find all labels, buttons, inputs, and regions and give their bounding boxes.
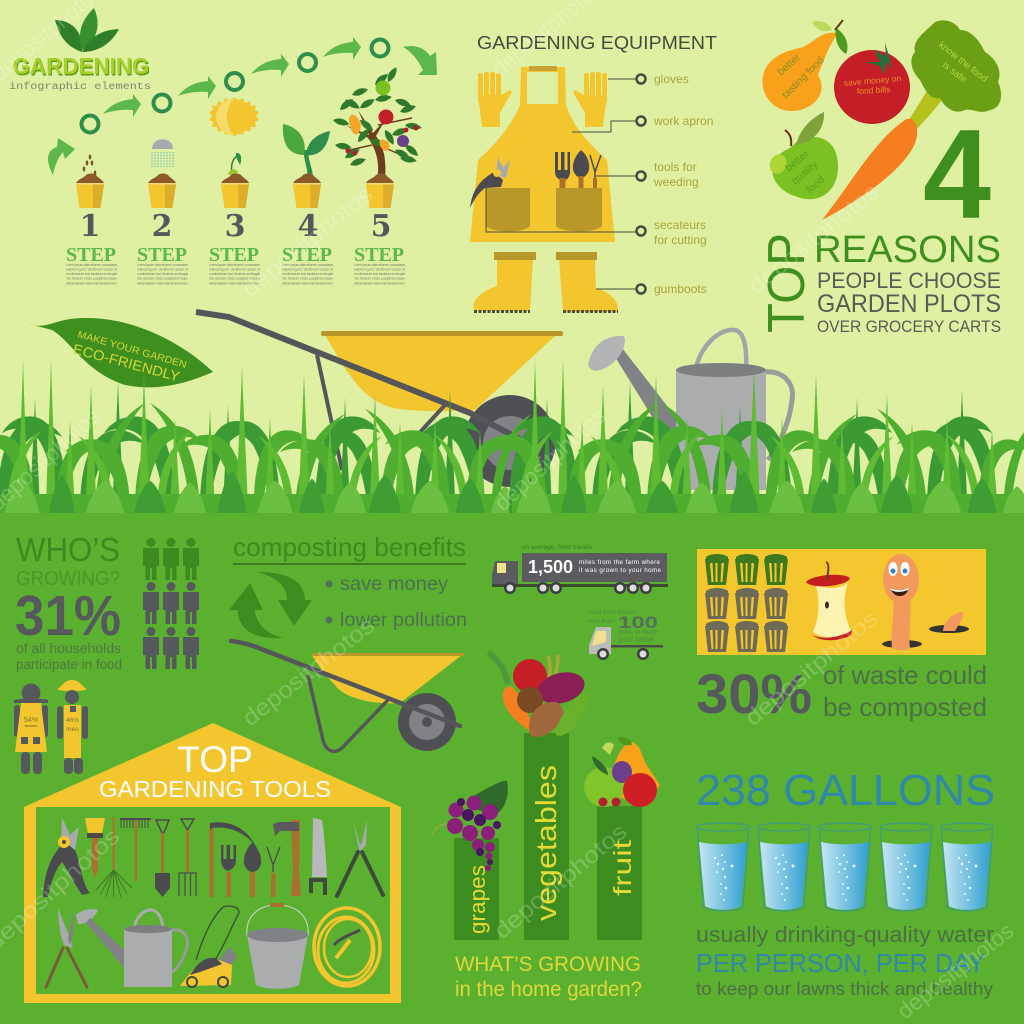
leaf text: ECO-FRIENDLY [71, 340, 182, 385]
heading: gardening tools: GARDENING TOOLS [99, 776, 331, 802]
yellow banner [697, 549, 986, 655]
icon: apron [470, 66, 615, 242]
grass blades left [0, 358, 531, 513]
step label: STEP [354, 244, 404, 266]
frame [308, 675, 388, 751]
tool: fork [179, 819, 196, 896]
tool: lawn mower [180, 906, 239, 987]
tray [312, 655, 462, 703]
truck: local food [588, 609, 663, 660]
tool: bucket [247, 903, 308, 989]
icon: recycle arrows [229, 572, 312, 638]
caption: local food travels [588, 609, 638, 616]
icon: carrot and broccoli: is safe [940, 60, 969, 85]
benefit: lower pollution: lower pollution [340, 609, 467, 631]
icon: fruit cluster [584, 737, 660, 807]
wheel [464, 395, 556, 487]
logo wordmark shadow and word: GARDENING [12, 53, 150, 79]
step number: 3 [225, 209, 245, 244]
equipment labels: tools for [654, 160, 697, 174]
icon: apron secateurs [470, 157, 510, 208]
legs [317, 355, 445, 470]
tool: pruner [43, 817, 90, 897]
icon: logo leaves [55, 8, 119, 52]
icon: fruit tree [332, 66, 422, 178]
arrow path [48, 37, 437, 175]
lorem text: condimentum erat, faucibus non feugiat [66, 272, 117, 276]
icon: pot [76, 174, 104, 208]
tool: saw [309, 818, 327, 895]
icon: apple: food [804, 174, 827, 196]
truck: long-distance food [492, 544, 668, 594]
step 5 [332, 66, 422, 286]
trailer text: miles from the farm where [579, 559, 661, 566]
panel: top 4 reasons [758, 20, 1001, 336]
lower green background [0, 513, 1024, 1024]
tool: watering can [76, 909, 187, 987]
handle top [695, 330, 746, 372]
trailer [522, 553, 667, 582]
chart: what's growing [432, 653, 660, 1001]
equipment labels: work apron [653, 114, 713, 128]
lorem text: nisl. Aenean. Class suscipit dui neque [354, 276, 405, 280]
icon: worm [882, 554, 969, 650]
step number: 4 [298, 209, 318, 244]
watermark: depositphotos [740, 605, 883, 731]
bar: vegetables [524, 733, 569, 940]
lorem text: Lorem ipsum dolor sit amet, consectetur [282, 263, 334, 267]
rim [676, 363, 766, 377]
step label: STEP [282, 244, 332, 266]
heading: 238 GALLONS [696, 766, 995, 815]
lorem text: adipiscing elit. Vestibulum auctor at [209, 268, 260, 272]
icon: weeding tools [555, 150, 601, 190]
equipment labels: weeding [653, 175, 699, 189]
label: vegetables: vegetables [531, 765, 563, 921]
lorem text: adipiscing elit. Vestibulum auctor at [282, 268, 333, 272]
chassis [492, 584, 668, 587]
icon: grapes [432, 781, 508, 871]
icon: watering shower [152, 139, 173, 167]
lorem text: Lorem ipsum dolor sit amet, consectetur [209, 263, 261, 267]
heading: composting benefits [233, 532, 466, 562]
watermark: depositphotos [237, 612, 379, 731]
tool: loppers [46, 908, 87, 987]
step 2 [137, 139, 189, 286]
small wheelbarrow [231, 641, 464, 751]
lorem text: nisl. Aenean. Class suscipit dui neque [66, 276, 117, 280]
lorem text: Lorem ipsum dolor sit amet, consectetur [66, 263, 118, 267]
REASONS heading: REASONS [814, 229, 1001, 271]
reasons subheading: OVER GROCERY CARTS [817, 318, 1001, 336]
house frame [24, 723, 401, 1003]
lorem text: nisl. Aenean. Class suscipit dui neque [209, 276, 260, 280]
wheel [398, 693, 456, 751]
step number: 2 [152, 209, 172, 244]
icon: pear [762, 20, 848, 111]
watermark: depositphotos [489, 403, 610, 516]
lorem text: condimentum erat, faucibus non feugiat [282, 272, 333, 276]
step 3 [209, 97, 261, 286]
eco-friendly leaf [25, 318, 213, 387]
stat: 30% [696, 662, 812, 725]
rose [588, 336, 625, 371]
emphasised caption: PER PERSON, PER DAY [696, 948, 985, 978]
tool: hand fork [221, 845, 236, 897]
icon: trash cans [705, 554, 788, 652]
lorem text: varius aliquam, dolor odio tincidunt sem [209, 282, 260, 286]
icon: vegetables [488, 653, 589, 737]
equipment labels: gumboots [654, 282, 707, 296]
logo wordmark shadow and word: GARDENING [14, 54, 150, 80]
reasons subheading: PEOPLE CHOOSE [817, 268, 1001, 293]
body [676, 370, 766, 490]
steps flow arrows and circles [48, 37, 437, 175]
who's growing panel [14, 531, 199, 774]
step number: 1 [80, 209, 100, 244]
caption: be composted [823, 692, 987, 722]
lorem text: varius aliquam, dolor odio tincidunt sem [282, 282, 333, 286]
lorem text: condimentum erat, faucibus non feugiat [137, 272, 188, 276]
lorem text: varius aliquam, dolor odio tincidunt sem [354, 282, 405, 286]
step circles [82, 40, 388, 132]
benefit: save money: save money [340, 573, 448, 595]
lorem text: nisl. Aenean. Class suscipit dui neque [282, 276, 333, 280]
leaf text: MAKE YOUR GARDEN [76, 329, 188, 371]
caption: your table [618, 635, 654, 644]
icon: sprout [228, 153, 241, 176]
grass band [0, 358, 1024, 513]
panel: gardening equipment [470, 32, 717, 312]
man figure: men [66, 726, 79, 733]
caption: on average, food travels [522, 544, 592, 551]
lorem text: condimentum erat, faucibus non feugiat [354, 272, 405, 276]
tool: leaf rake [96, 817, 132, 897]
tool: hose [314, 908, 380, 986]
big number 4: 4 [923, 103, 991, 245]
large wheelbarrow [196, 312, 563, 487]
bar: fruit [597, 806, 642, 940]
caption: participate in food [16, 657, 122, 672]
people pictogram [143, 538, 199, 669]
equipment labels [653, 72, 713, 296]
step label: STEP [209, 244, 259, 266]
large watering can [588, 330, 793, 490]
lorem text: condimentum erat, faucibus non feugiat [209, 272, 260, 276]
logo subtitle: infographic elements [9, 81, 151, 93]
tool: scythe [210, 822, 255, 897]
icon: apple: better [783, 148, 812, 174]
handle [196, 312, 535, 447]
tool: axe [273, 820, 301, 896]
woman figure: women [25, 723, 37, 728]
trailer text: it was grown to your home [579, 567, 662, 574]
man figure: 46% [66, 717, 79, 724]
cab [492, 561, 518, 585]
caption: of all households [16, 641, 121, 656]
cab [589, 627, 611, 654]
leader lines [486, 79, 636, 289]
lorem text: adipiscing elit. Vestibulum auctor at [66, 268, 117, 272]
equipment labels: for cutting [654, 233, 707, 247]
label: fruit: fruit [609, 840, 637, 896]
icon: apple core [806, 562, 852, 640]
step 4 [282, 124, 334, 286]
label: grapes: grapes [465, 865, 490, 934]
reasons subheading: GARDEN PLOTS [817, 290, 1001, 318]
lorem text: adipiscing elit. Vestibulum auctor at [354, 268, 405, 272]
equipment labels: secateurs [654, 218, 706, 232]
heading: GARDENING EQUIPMENT [477, 32, 717, 53]
caption: less than [588, 618, 614, 625]
step number: 5 [371, 209, 391, 244]
tool: brush [85, 818, 105, 878]
distance: 1,500 [528, 557, 573, 577]
caption: usually drinking-quality water [696, 922, 994, 947]
tool: trowel [244, 842, 261, 897]
handle [231, 641, 460, 726]
icon: left glove [478, 72, 512, 127]
watermark: depositphotos [743, 178, 883, 299]
icon: pot [148, 174, 176, 208]
icon: pot [366, 174, 394, 208]
icon: apple: quality [789, 158, 821, 187]
icon: gumboots [473, 252, 618, 312]
rotated TOP: TOP [758, 233, 816, 333]
icon: seedling [283, 124, 330, 177]
icon: apple [767, 112, 838, 199]
tray [325, 335, 556, 411]
tool: rake [120, 818, 151, 881]
leader dots [636, 74, 646, 294]
logo: gardening [9, 8, 151, 93]
woman figure [14, 684, 48, 774]
composting benefits panel [229, 532, 467, 638]
heading rule [233, 563, 466, 565]
caption: to keep our lawns thick and healthy [696, 978, 994, 999]
caption: miles to reach [618, 629, 659, 636]
icon: pear: better [775, 51, 803, 78]
icon: sun [209, 97, 259, 137]
icon: right glove [573, 72, 607, 127]
tray rim [312, 653, 464, 656]
watermark: depositphotos [489, 818, 632, 944]
pockets [486, 188, 602, 231]
icon: carrot and broccoli: know the food [936, 40, 990, 85]
icon: seeds [83, 154, 96, 176]
reasons subheading [817, 268, 1001, 336]
wheels [504, 582, 652, 594]
watermark: depositphotos [237, 181, 377, 302]
tool: weeder [267, 847, 280, 897]
icon: pot [293, 174, 321, 208]
equipment labels: gloves [654, 72, 689, 86]
panel: compost waste [696, 549, 987, 725]
step 1 [66, 154, 118, 286]
spout [612, 348, 682, 465]
step label: STEP [137, 244, 187, 266]
side handle [763, 372, 793, 460]
lorem text: varius aliquam, dolor odio tincidunt sem [66, 282, 117, 286]
icon: tomato: food bills [857, 84, 891, 96]
heading: WHO’S [16, 531, 120, 568]
subheading: GROWING? [16, 568, 120, 590]
panel: top gardening tools house [24, 723, 401, 1003]
stat: 31% [15, 584, 121, 648]
man figure [57, 680, 88, 774]
lorem text: Lorem ipsum dolor sit amet, consectetur [137, 263, 189, 267]
icon: carrot and broccoli [822, 20, 1001, 220]
chart caption: in the home garden? [455, 978, 642, 1001]
heading: top: TOP [177, 739, 253, 780]
lorem text: Lorem ipsum dolor sit amet, consectetur [354, 263, 406, 267]
leaf shape [25, 318, 213, 387]
bullets [326, 580, 332, 624]
icon: pot [221, 174, 249, 208]
tool: shears [337, 820, 383, 896]
tool: spade [155, 820, 170, 897]
chart caption: WHAT’S GROWING [455, 953, 641, 976]
lorem text: nisl. Aenean. Class suscipit dui neque [137, 276, 188, 280]
wheels [597, 648, 649, 660]
icon: tomato: save money on [843, 73, 902, 88]
lorem text: varius aliquam, dolor odio tincidunt sem [137, 282, 188, 286]
icon: pear: tasting food [780, 54, 827, 101]
watermark: depositphotos [892, 917, 1018, 1024]
bar: grapes [454, 838, 499, 940]
caption: of waste could [823, 660, 987, 690]
flatbed [611, 645, 663, 648]
distance: 100 [618, 613, 658, 632]
panel: water use [696, 766, 995, 999]
grass blades right [482, 358, 1024, 513]
icon: tomato [834, 43, 910, 124]
icon: water glasses [697, 823, 993, 911]
woman figure: 54% [24, 717, 38, 724]
step label: STEP [66, 244, 116, 266]
lorem text: adipiscing elit. Vestibulum auctor at [137, 268, 188, 272]
